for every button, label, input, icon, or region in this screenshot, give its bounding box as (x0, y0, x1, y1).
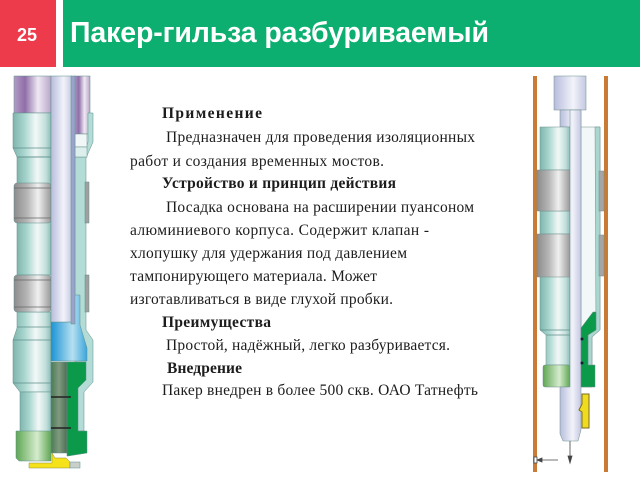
flow arrow down (568, 441, 572, 463)
right side wall (581, 127, 600, 387)
green body (67, 362, 87, 456)
central tube (560, 110, 581, 441)
orange casing (533, 76, 608, 472)
purple upper sleeve (14, 76, 90, 134)
slide number badge (0, 0, 56, 67)
design text: алюминиевого корпуса. Содержит клапан - (130, 222, 429, 239)
grey sealing rings (14, 183, 51, 312)
design text: хлопушку для удержания под давлением (130, 245, 407, 262)
yellow flapper (579, 394, 589, 428)
application text: работ и создания временных мостов. (130, 153, 384, 170)
advantages text: Простой, надёжный, легко разбуривается. (166, 337, 450, 354)
pins (51, 397, 71, 428)
right diagram: packer after setting (533, 76, 608, 472)
grey valve seat (70, 462, 80, 468)
blue cement chamber (51, 295, 87, 361)
green body (581, 312, 596, 387)
teal sections (540, 127, 570, 365)
title banner: Пакер-гильза разбуриваемый (70, 17, 489, 49)
green shoe (543, 365, 570, 387)
left diagram: packer in section (13, 76, 93, 468)
application text: Предназначен для проведения изоляционных (166, 129, 475, 146)
heading: advantages: Преимущества (162, 314, 271, 331)
green shoe (16, 431, 51, 461)
text block (130, 105, 478, 399)
design text: Посадка основана на расширении пуансоном (166, 199, 474, 216)
application text (130, 129, 475, 170)
green body pins (580, 338, 584, 364)
heading: design: Устройство и принцип действия (162, 175, 396, 192)
slide number badge: 25 (17, 25, 37, 45)
design text (130, 199, 474, 308)
heading: application: Применение (162, 105, 262, 122)
title banner (63, 0, 640, 67)
teal body (13, 113, 51, 432)
dark green core (51, 362, 67, 453)
central tube (51, 76, 72, 322)
grey rings (537, 170, 604, 277)
right wall section (75, 113, 93, 431)
heading: adoption: Внедрение (167, 360, 242, 377)
tube wall (71, 76, 75, 324)
rod (560, 110, 581, 127)
top lavender block (554, 76, 586, 110)
setting arrow (534, 457, 558, 463)
design text: изготавливаться в виде глухой пробки. (130, 291, 393, 308)
yellow valve (29, 453, 70, 468)
design text: тампонирующего материала. Может (130, 268, 377, 285)
adoption text: Пакер внедрен в более 500 скв. ОАО Татнефть (162, 382, 478, 399)
